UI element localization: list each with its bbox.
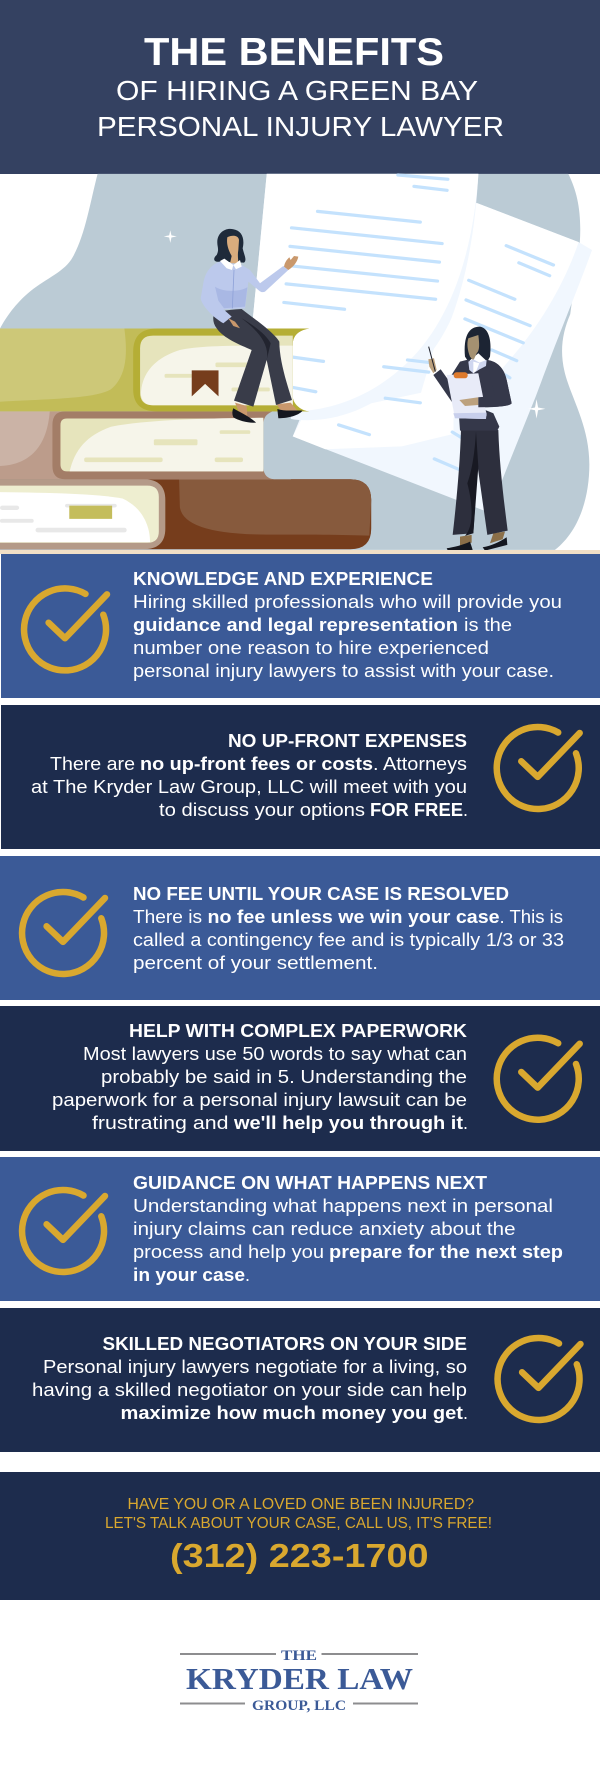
phone number: (312) 223-1700: [170, 1537, 428, 1574]
text: guidance on what happens next: in your case: [133, 1265, 245, 1285]
title: OF HIRING A GREEN BAY: [116, 75, 478, 106]
text: complex paperwork: HELP WITH COMPLEX PAPERWORK: [129, 1021, 467, 1041]
text: knowledge and experience: is the: [464, 615, 512, 635]
text: complex paperwork: paperwork for a personal injury lawsuit can be: [52, 1090, 467, 1110]
text: call to action: HAVE YOU OR A LOVED ONE BEEN INJURED?: [128, 1496, 474, 1513]
title: PERSONAL INJURY LAWYER: [97, 111, 504, 142]
book: top olive: [0, 329, 309, 411]
figure: standing woman with clipboard: [428, 327, 512, 552]
text: guidance on what happens next: prepare for the next step: [329, 1242, 563, 1262]
text: knowledge and experience: guidance and legal representation: [133, 615, 458, 635]
text: skilled negotiators: .: [463, 1403, 468, 1423]
panel: complex paperwork: [0, 1006, 600, 1151]
logo: The Kryder Law Group, LLC: GROUP, LLC: [252, 1698, 346, 1714]
book: bottom brown: [0, 479, 371, 549]
text: knowledge and experience: KNOWLEDGE AND EXPERIENCE: [133, 569, 433, 589]
text: guidance on what happens next: GUIDANCE ON WHAT HAPPENS NEXT: [133, 1173, 487, 1193]
text: skilled negotiators: [32, 1334, 468, 1423]
text: no up-front expenses: at The Kryder Law Group, LLC will meet with you: [31, 777, 467, 797]
text: complex paperwork: frustrating and: [92, 1113, 228, 1133]
illustration: lawyers with books and documents: [0, 174, 592, 552]
paper: front sheet: [253, 174, 478, 420]
text: complex paperwork: probably be said in 5. Understanding the: [101, 1067, 467, 1087]
text: guidance on what happens next: Understanding what happens next in personal: [133, 1196, 553, 1216]
floor line: [0, 550, 600, 554]
text: guidance on what happens next: [133, 1173, 563, 1285]
text: no fee until resolved: percent of your settlement.: [133, 953, 378, 973]
icon: gold check: [498, 1338, 580, 1420]
text: skilled negotiators: Personal injury lawyers negotiate for a living, so: [43, 1357, 467, 1377]
panel: no fee until resolved: [0, 856, 600, 1000]
text: no up-front expenses: . Attorneys: [373, 754, 467, 774]
text: knowledge and experience: Hiring skilled professionals who will provide you: [133, 592, 562, 612]
background blob: [0, 174, 589, 550]
panel: no up-front expenses: [1, 705, 600, 849]
paper: back sheet: [293, 203, 592, 511]
text: no up-front expenses: There are: [50, 754, 135, 774]
figure: seated woman: [201, 229, 303, 423]
text: guidance on what happens next: .: [245, 1265, 250, 1285]
logo: The Kryder Law Group, LLC: [180, 1648, 418, 1714]
text: skilled negotiators: SKILLED NEGOTIATORS ON YOUR SIDE: [102, 1334, 467, 1354]
text: call to action: LET'S TALK ABOUT YOUR CASE, CALL US, IT'S FREE!: [105, 1515, 492, 1532]
logo: The Kryder Law Group, LLC: KRYDER LAW: [186, 1661, 413, 1696]
icon: gold check: [22, 1190, 105, 1272]
text: no fee until resolved: . This is: [500, 907, 563, 927]
text: complex paperwork: .: [463, 1113, 468, 1133]
panel: call to action: [0, 1472, 600, 1600]
icon: bookmark: [192, 370, 219, 396]
panel: guidance on what happens next: [0, 1157, 600, 1301]
text: no fee until resolved: NO FEE UNTIL YOUR CASE IS RESOLVED: [133, 884, 509, 904]
panel: header: [0, 0, 600, 174]
text: knowledge and experience: personal injury lawyers to assist with your case.: [133, 661, 554, 681]
text: no up-front expenses: NO UP-FRONT EXPENSES: [228, 731, 467, 751]
icon: sparkle right: [528, 399, 545, 419]
text: no up-front expenses: to discuss your options: [159, 800, 365, 820]
text: complex paperwork: we'll help you through it: [233, 1113, 463, 1133]
text: knowledge and experience: number one reason to hire experienced: [133, 638, 489, 658]
text: no up-front expenses: FOR FREE: [370, 800, 463, 820]
icon: sparkle left: [164, 230, 177, 243]
title: [97, 31, 504, 142]
icon: gold check: [24, 588, 107, 670]
icon: gold check: [22, 892, 105, 974]
logo: The Kryder Law Group, LLC: THE: [281, 1648, 317, 1664]
text: no fee until resolved: called a contingency fee and is typically 1/3 or 33: [133, 930, 564, 950]
book: middle tan: [0, 411, 291, 479]
text: no fee until resolved: no fee unless we win your case: [208, 907, 500, 927]
text: no fee until resolved: [133, 884, 564, 973]
icon: gold check: [497, 727, 580, 809]
title: THE BENEFITS: [144, 31, 444, 74]
text: guidance on what happens next: process and help you: [133, 1242, 324, 1262]
text: complex paperwork: [52, 1021, 468, 1133]
text: skilled negotiators: maximize how much money you get: [120, 1403, 463, 1423]
text: guidance on what happens next: injury claims can reduce anxiety about the: [133, 1219, 516, 1239]
text: skilled negotiators: having a skilled negotiator on your side can help: [32, 1380, 467, 1400]
text: no up-front expenses: [31, 731, 468, 820]
text: no fee until resolved: There is: [133, 907, 202, 927]
icon: gold check: [497, 1038, 580, 1120]
text: no up-front expenses: .: [463, 800, 468, 820]
panel: skilled negotiators: [0, 1308, 600, 1452]
text: knowledge and experience: [133, 569, 562, 681]
text: call to action: [105, 1496, 492, 1532]
text: complex paperwork: Most lawyers use 50 words to say what can: [83, 1044, 467, 1064]
text: no up-front expenses: no up-front fees or costs: [140, 754, 373, 774]
panel: knowledge and experience: [1, 554, 600, 698]
